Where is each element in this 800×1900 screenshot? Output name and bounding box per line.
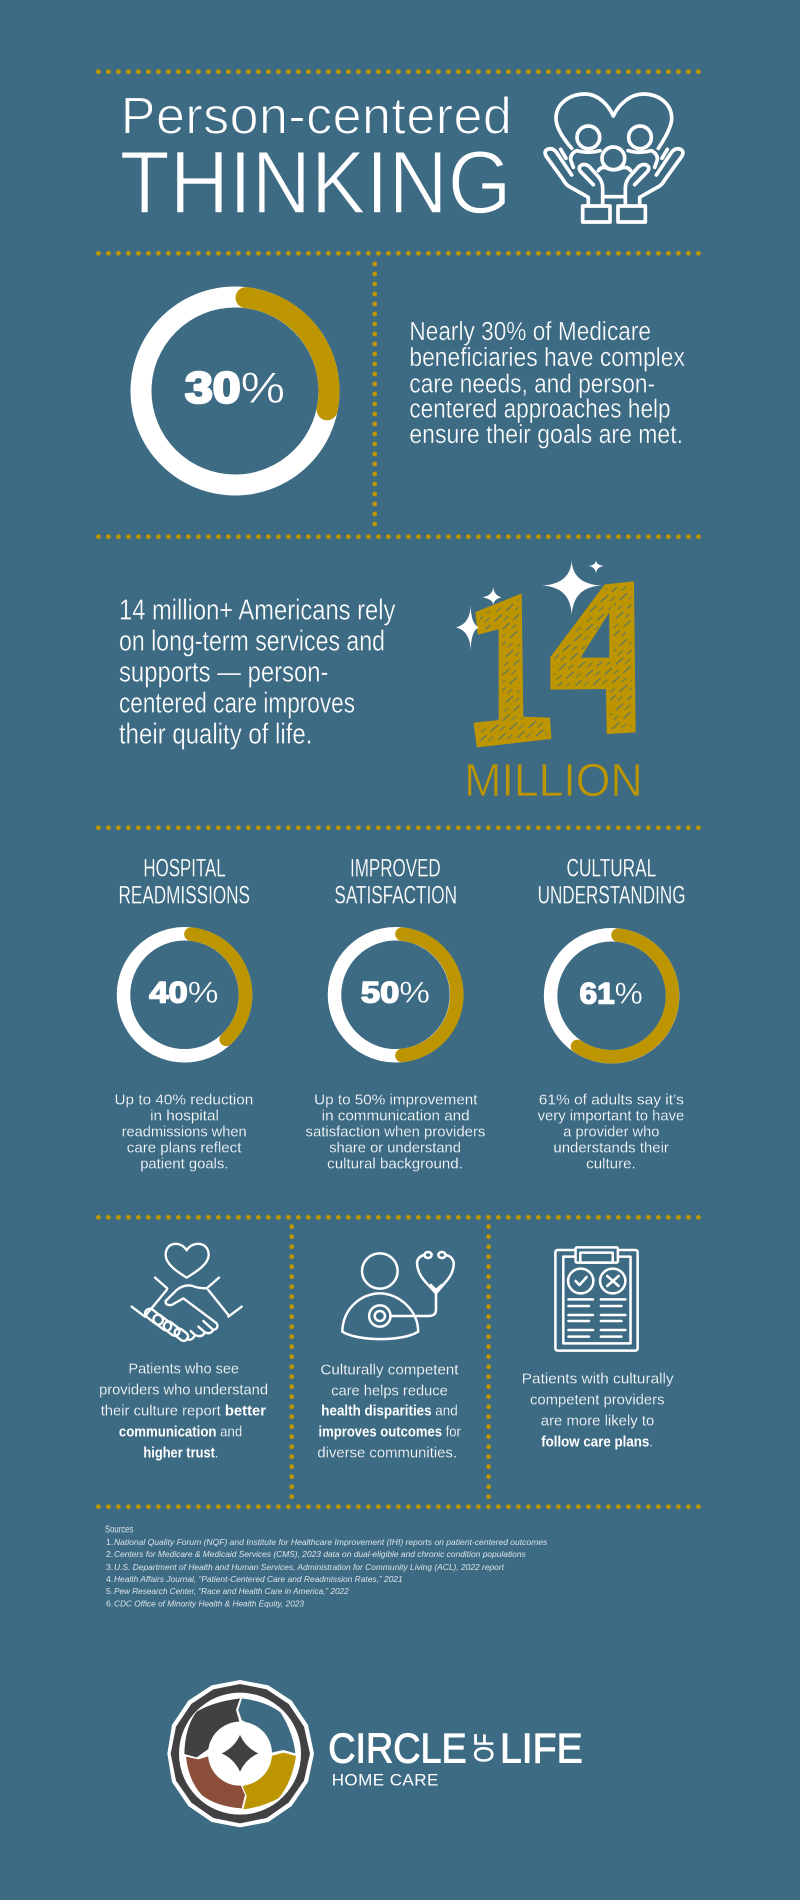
panel: care plans (522, 1247, 674, 1450)
sources list: 2. (106, 1549, 113, 1559)
title: THINKING (120, 132, 512, 232)
text block: care plans: Patients with culturally (522, 1370, 674, 1387)
text block: health disparities: diverse communities. (317, 1444, 457, 1461)
logo wordmark (328, 1725, 583, 1790)
body text: readmissions: patient goals. (140, 1155, 228, 1172)
body text: culture: understands their (553, 1140, 669, 1157)
sources list: 4. (106, 1574, 113, 1584)
icon: handshake with heart (132, 1244, 242, 1343)
heading: improved satisfaction (334, 856, 457, 909)
icon: hands holding family in heart (545, 94, 683, 222)
body text: satisfaction: share or understand (329, 1140, 461, 1157)
text block: 14 million Americans: centered care improves (119, 688, 355, 720)
panel: better communication (99, 1244, 268, 1461)
stat ring: 30%: 30% (185, 364, 285, 413)
heading: hospital readmissions: HOSPITAL (143, 856, 226, 883)
text block: better communication: communication and (119, 1423, 242, 1440)
text block: better communication: Patients who see (128, 1360, 239, 1377)
text block: health disparities (317, 1361, 461, 1461)
stat ring: 40%: 40% (149, 976, 218, 1009)
panel: improved satisfaction (306, 856, 485, 1172)
text block: better communication: higher trust. (143, 1444, 218, 1461)
text block: health disparities: Culturally competent (320, 1361, 459, 1378)
logo wordmark: OF (469, 1734, 499, 1762)
sources list: 3. (106, 1562, 113, 1572)
text block: care plans: follow care plans. (541, 1433, 653, 1450)
title: Person-centered (121, 88, 512, 146)
heading: cultural understanding: CULTURAL (566, 856, 656, 883)
sources list: 5. (106, 1586, 113, 1596)
graphic: sketched number 14 with sparkles (456, 560, 643, 806)
logo wordmark: LIFE (500, 1725, 583, 1772)
text block: health disparities: care helps reduce (331, 1382, 448, 1399)
heading: cultural understanding (538, 856, 686, 909)
text block: Medicare complex care: beneficiaries have complex (409, 344, 685, 372)
body text: culture: very important to have (538, 1108, 684, 1125)
heading: hospital readmissions (118, 856, 250, 909)
body text: culture: 61% of adults say it’s (539, 1091, 684, 1108)
sources list: Pew Research Center, “Race and Health Care in America,” 2022 (114, 1586, 349, 1596)
body text: satisfaction: satisfaction when providers (306, 1124, 485, 1141)
heading: improved satisfaction: IMPROVED (350, 856, 441, 883)
sources list: Centers for Medicare & Medicaid Services (CMS), 2023 data on dual-eligible and chronic condition populations (114, 1549, 526, 1559)
sources list: 1. (106, 1537, 113, 1547)
heading: hospital readmissions: READMISSIONS (118, 882, 250, 909)
text block: 14 million Americans: their quality of life. (119, 718, 312, 750)
text block: health disparities: improves outcomes for (318, 1423, 461, 1440)
icon: clipboard checklist (555, 1247, 638, 1351)
body text: readmissions: readmissions when (122, 1124, 247, 1141)
text block: 14 million Americans (119, 594, 396, 750)
panel: health disparities (317, 1252, 461, 1461)
icon: person with stethoscope (342, 1252, 454, 1339)
body text: readmissions: Up to 40% reduction (114, 1091, 253, 1108)
panel: hospital readmissions (114, 856, 253, 1172)
text block: better communication: their culture report better (101, 1402, 266, 1419)
text block: Medicare complex care: Nearly 30% of Medicare (409, 318, 651, 346)
body text: culture (538, 1091, 684, 1172)
logo wordmark: HOME CARE (332, 1771, 438, 1790)
body text: satisfaction: Up to 50% improvement (314, 1091, 478, 1108)
text block: 14 million Americans: supports — person- (119, 657, 328, 689)
body text: culture: culture. (586, 1155, 636, 1172)
heading: cultural understanding: UNDERSTANDING (538, 882, 686, 909)
logo wordmark: CIRCLE (328, 1725, 467, 1772)
sources list: U.S. Department of Health and Human Services, Administration for Community Living (ACL), 2022 report (114, 1562, 505, 1572)
text block: better communication: providers who understand (99, 1381, 268, 1398)
text block: care plans (522, 1370, 674, 1450)
stat ring: 50%: 50% (361, 976, 430, 1009)
text block: Medicare complex care: ensure their goals are met. (409, 421, 683, 449)
logo emblem (167, 1680, 314, 1827)
graphic: sketched number 14 with sparkles: MILLION (464, 754, 643, 806)
title (120, 88, 512, 232)
heading: improved satisfaction: SATISFACTION (334, 882, 457, 909)
sources list (105, 1525, 548, 1609)
stat ring: 61% (551, 935, 673, 1057)
text block: Medicare complex care (409, 318, 685, 449)
sources list: CDC Office of Minority Health & Health Equity, 2023 (114, 1599, 304, 1609)
body text: readmissions: in hospital (150, 1108, 219, 1125)
sources list: Health Affairs Journal, “Patient-Centered Care and Readmission Rates,” 2021 (114, 1574, 403, 1584)
stat ring: 50% (334, 934, 457, 1056)
stat ring: 61%: 61% (580, 977, 643, 1010)
sources list: Sources (105, 1525, 133, 1536)
body text: satisfaction (306, 1091, 485, 1172)
sources list: National Quality Forum (NQF) and Institute for Healthcare Improvement (IHI) reports on patient-centered outcomes (114, 1537, 548, 1547)
text block: care plans: are more likely to (541, 1412, 654, 1429)
stat ring: 40% (124, 934, 246, 1056)
text block: health disparities: health disparities and (321, 1402, 458, 1419)
body text: satisfaction: in communication and (322, 1108, 470, 1125)
body text: culture: a provider who (563, 1124, 659, 1141)
text block: Medicare complex care: centered approaches help (409, 396, 671, 424)
logo: Circle of Life Home Care (167, 1680, 583, 1827)
panel: cultural understanding (538, 856, 686, 1172)
body text: readmissions: care plans reflect (127, 1140, 242, 1157)
text block: better communication (99, 1360, 268, 1461)
sources list: 6. (106, 1599, 113, 1609)
text block: 14 million Americans: 14 million+ Americans rely (119, 594, 396, 626)
text block: care plans: competent providers (530, 1391, 664, 1408)
body text: satisfaction: cultural background. (327, 1155, 463, 1172)
body text: readmissions (114, 1091, 253, 1172)
text block: 14 million Americans: on long-term services and (119, 626, 385, 658)
text block: Medicare complex care: care needs, and person- (409, 370, 655, 398)
stat ring: 30% (141, 297, 329, 485)
